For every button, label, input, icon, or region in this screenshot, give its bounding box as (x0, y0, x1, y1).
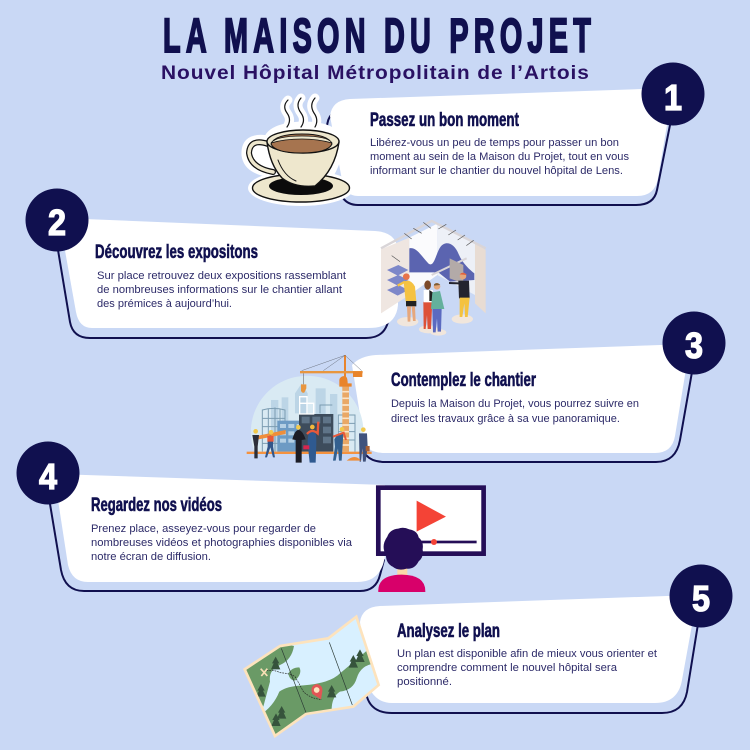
number badge 3 (662, 312, 726, 374)
number badge 2: 2 (48, 203, 66, 243)
text: step 4: nombreuses vidéos et photographies disponibles via (91, 537, 353, 549)
text: step 2 (97, 270, 346, 310)
icon: construction site (247, 355, 372, 463)
panel: step 5 (360, 564, 732, 713)
visitor middle (423, 280, 433, 329)
heading: step 1: Passez un bon moment (370, 110, 519, 131)
text: step 1: moment au sein de la Maison du Projet, tout en vous (370, 151, 629, 163)
text: step 2: de nombreuses informations sur le chantier allant (97, 284, 342, 296)
panel: step 3 (352, 312, 726, 462)
number badge 4 (16, 442, 80, 504)
workers (252, 422, 370, 463)
icon: folded map (243, 617, 379, 738)
heading: step 5: Analysez le plan (397, 621, 500, 642)
subtitle: Nouvel Hôpital Métropolitain de l’Artois (161, 63, 589, 84)
icon: coffee cup (246, 98, 354, 206)
text: step 5: comprendre comment le nouvel hôpital sera (397, 662, 618, 674)
text: step 1: Libérez-vous un peu de temps pour passer un bon (370, 137, 619, 149)
text: step 1 (370, 137, 629, 177)
number badge 4: 4 (39, 457, 57, 497)
text: step 5 (397, 648, 657, 688)
text: step 3: Depuis la Maison du Projet, vous pourrez suivre en (391, 398, 639, 410)
guide (449, 273, 470, 317)
number badge 3: 3 (685, 326, 703, 366)
title: LA MAISON DU PROJET (163, 10, 591, 63)
text: step 4: notre écran de diffusion. (91, 551, 211, 563)
heading: step 4: Regardez nos vidéos (91, 495, 222, 516)
text: step 3: direct les travaux grâce à sa vue panoramique. (391, 413, 620, 425)
panel: step 4 (16, 442, 385, 591)
heading: step 3: Contemplez le chantier (391, 370, 536, 391)
visitor teal (431, 283, 444, 332)
text: step 5: Un plan est disponible afin de mieux vous orienter et (397, 648, 657, 660)
panel: step 2 (26, 188, 398, 338)
text: step 4: Prenez place, asseyez-vous pour regarder de (91, 523, 316, 535)
panel: step 1 (327, 62, 704, 205)
number badge 1: 1 (664, 78, 682, 118)
text: step 2: Sur place retrouvez deux expositions rassemblant (97, 270, 346, 282)
text: step 4 (91, 523, 353, 563)
icon: exhibition stand with visitors (381, 221, 486, 336)
heading: step 2: Découvrez les expositons (95, 242, 258, 263)
text: step 2: des prémices à aujourd’hui. (97, 298, 232, 310)
number badge 1 (642, 62, 704, 126)
text: step 5: positionné. (397, 676, 452, 688)
number badge 5 (670, 564, 732, 628)
number badge 2 (26, 188, 88, 252)
text: step 1: informant sur le chantier du nouvel hôpital de Lens. (370, 165, 623, 177)
number badge 5: 5 (692, 579, 710, 619)
text: step 3 (391, 398, 639, 425)
visitor left (398, 273, 416, 322)
icon: video screen with viewer (378, 488, 484, 592)
crane (300, 355, 363, 452)
